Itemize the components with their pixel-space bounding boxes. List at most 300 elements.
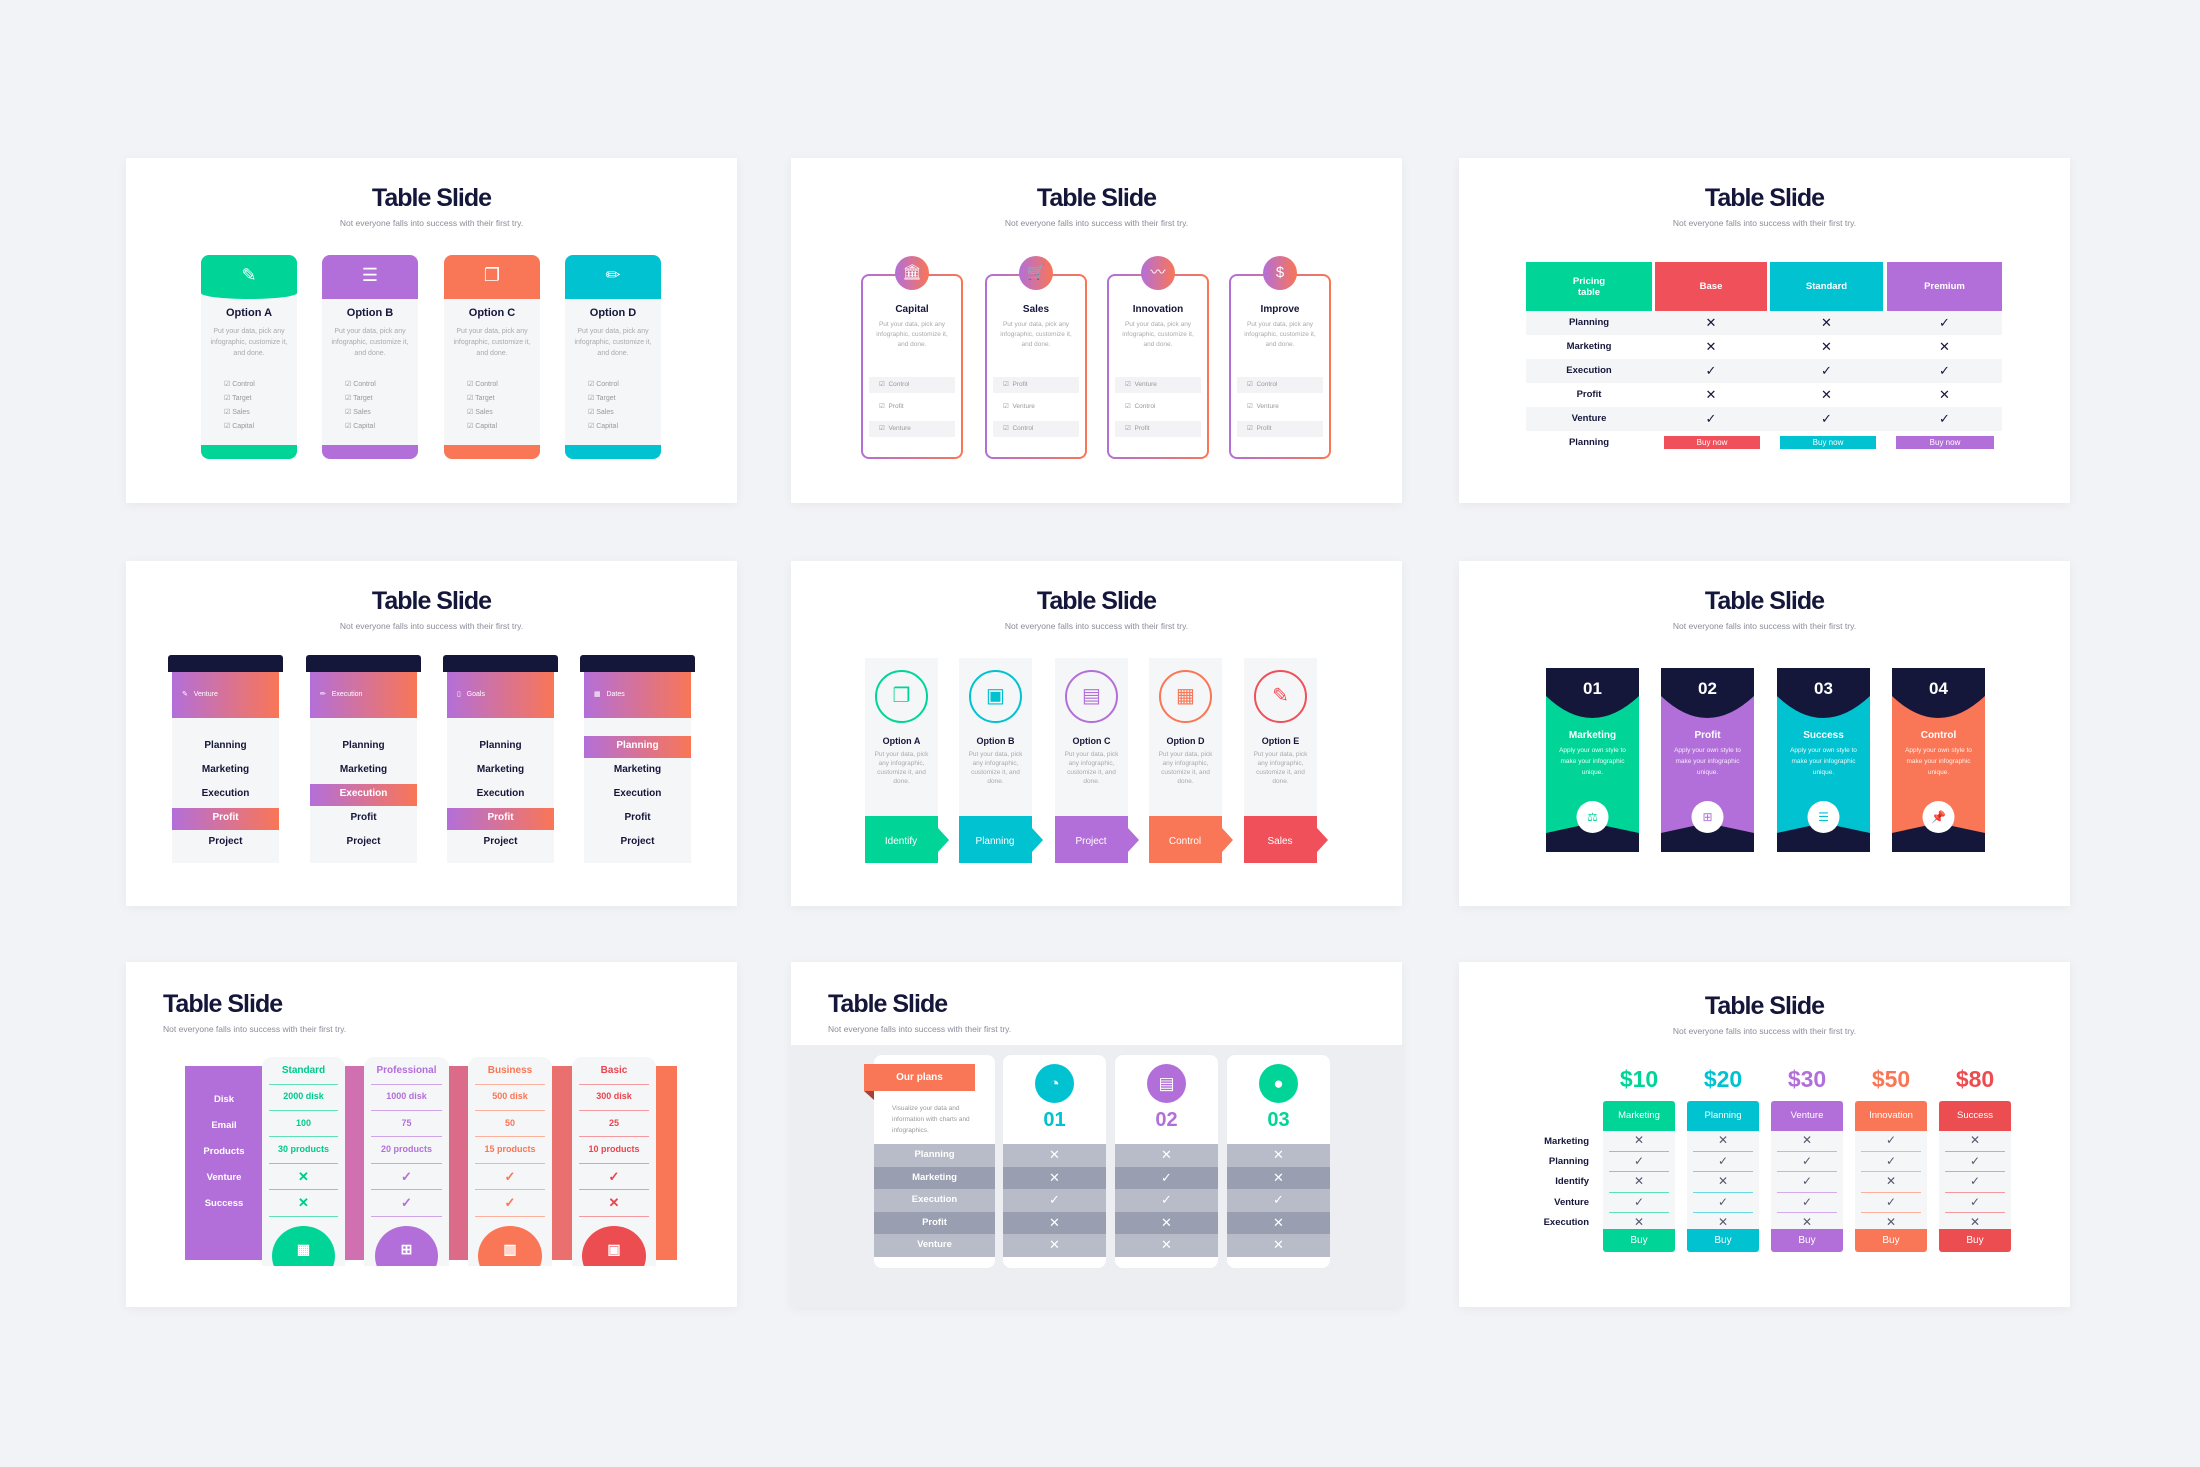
label column: Success [205, 1198, 243, 1209]
table: ✕ [1706, 387, 1716, 402]
plan: Business: 50 [505, 1118, 515, 1128]
card 02 Profit: ⊞ [1702, 810, 1713, 824]
plan: Business: 500 disk [492, 1091, 528, 1101]
plan: Professional [364, 1057, 449, 1266]
card: 03: ✕ [1273, 1237, 1284, 1252]
table [1526, 262, 2002, 449]
column $30 Venture: Venture [1791, 1110, 1823, 1121]
card: Our plans: Marketing [912, 1172, 957, 1183]
plan: Basic: ✓ [609, 1168, 619, 1184]
card: 01 [1003, 1055, 1106, 1268]
slide 1: option cards [126, 158, 737, 503]
column $80 Success [1939, 1066, 2011, 1252]
table: table [1578, 287, 1600, 298]
plan: Standard: 100 [296, 1118, 311, 1128]
card: Option D: ☑ Control [588, 381, 619, 388]
card: 03: ✕ [1273, 1147, 1284, 1162]
card: Option B: ☑ Target [345, 395, 373, 402]
card: 03: ● [1273, 1074, 1284, 1093]
card: Option A: ☑ Sales [224, 409, 250, 416]
column: Option E [1244, 658, 1328, 863]
plan: Professional: 20 products [381, 1144, 432, 1154]
column: Option C: Project [1075, 836, 1107, 847]
card: Option C [444, 255, 540, 459]
card 02 Profit: Apply your own style to make your infographic unique. [1674, 747, 1741, 776]
plan: Standard [262, 1057, 345, 1266]
table: Base [1700, 281, 1722, 292]
table: Pricing [1573, 276, 1605, 287]
header band [791, 962, 1402, 1045]
card: Option D [565, 255, 661, 459]
card: Option D: ☑ Target [588, 395, 616, 402]
card: Our plans: Our plans [896, 1072, 943, 1083]
card: Innovation: Put your data, pick any infographic, customize it, and done. [1122, 321, 1194, 348]
table: Premium [1924, 281, 1965, 292]
plan: Standard: ✕ [298, 1195, 309, 1210]
card: Improve: ☑ Profit [1247, 425, 1272, 432]
table: ✕ [1939, 339, 1950, 354]
card: 02: 02 [1155, 1109, 1178, 1131]
column: Option C [1055, 658, 1139, 863]
column: Dates: Execution [614, 788, 661, 799]
card 04 Control [1892, 668, 1985, 852]
card: Option C: Put your data, pick any infographic, customize it, and done. [453, 328, 531, 357]
slide 2: outlined cards: 🏛 [902, 264, 922, 281]
column: Goals: Profit [487, 812, 514, 823]
card: Sales [985, 256, 1087, 459]
card: Improve: ☑ Control [1247, 381, 1277, 388]
title: Table Slide [828, 990, 947, 1018]
subtitle: Not everyone falls into success with their first try. [1005, 621, 1188, 631]
column: Dates: Marketing [614, 764, 661, 775]
card 03 Success: Apply your own style to make your infographic unique. [1790, 747, 1857, 776]
slide 6: numbered cards [1459, 561, 2070, 906]
card: Option A [201, 255, 297, 459]
card 02 Profit [1661, 668, 1754, 852]
column $30 Venture: ✕ [1802, 1215, 1812, 1229]
column $50 Innovation: Buy [1882, 1235, 1900, 1246]
card: Option C: ☑ Sales [467, 409, 493, 416]
column $20 Planning: ✓ [1718, 1195, 1728, 1209]
card: Sales: ☑ Control [1003, 425, 1033, 432]
column: Option B: Planning [976, 836, 1014, 847]
column $20 Planning: ✓ [1718, 1154, 1728, 1168]
table: ✕ [1821, 339, 1832, 354]
column: Venture [168, 655, 283, 863]
column $80 Success: Success [1957, 1110, 1993, 1121]
label column: Disk [214, 1094, 234, 1105]
plan: Standard: ✕ [298, 1168, 309, 1184]
column: Venture: Profit [212, 812, 239, 823]
column $80 Success: $80 [1956, 1066, 1994, 1092]
card: 03 [1227, 1055, 1330, 1268]
plan: Business [468, 1057, 552, 1266]
row labels: Marketing [1544, 1136, 1589, 1147]
card: Our plans: Planning [914, 1149, 955, 1160]
column $10 Marketing: ✓ [1634, 1154, 1644, 1168]
card: Capital: Put your data, pick any infographic, customize it, and done. [876, 321, 948, 348]
title: Table Slide [1705, 992, 1824, 1020]
card 04 Control: 04 [1929, 679, 1948, 698]
table: Planning [1569, 437, 1609, 448]
column: Goals: Project [484, 836, 517, 847]
card: Option D: ✏ [605, 265, 621, 285]
table: ✓ [1821, 363, 1832, 378]
column: Execution: Marketing [340, 764, 387, 775]
column: Option B: Put your data, pick any infographic, customize it, and done. [969, 751, 1022, 785]
plan: Basic: 300 disk [596, 1091, 632, 1101]
card: Our plans: Visualize your data and information with charts and infographics. [892, 1105, 970, 1134]
column $30 Venture [1771, 1066, 1843, 1252]
column: Option A: Identify [885, 836, 917, 847]
table: ✓ [1939, 363, 1950, 378]
card: Improve: Improve [1261, 304, 1299, 315]
plan: Basic: 25 [609, 1118, 619, 1128]
title: Table Slide [1705, 184, 1824, 212]
column: Option E: Sales [1267, 836, 1293, 847]
column: Dates: ▦ Dates [594, 691, 625, 698]
card: 02: ✕ [1161, 1147, 1172, 1162]
column: Venture: ✎ Venture [182, 691, 218, 698]
column: Option A [865, 658, 949, 863]
column: Goals: Planning [479, 740, 522, 751]
plan: Professional: 75 [401, 1118, 412, 1128]
card: Innovation [1107, 256, 1209, 459]
column $10 Marketing: $10 [1620, 1066, 1658, 1092]
card 02 Profit: Profit [1694, 730, 1721, 741]
column $10 Marketing: ✕ [1634, 1215, 1644, 1229]
plan: Standard: Standard [282, 1065, 325, 1076]
column $10 Marketing: ✓ [1634, 1195, 1644, 1209]
column: Goals: ▯ Goals [457, 691, 485, 698]
column: Execution: Planning [342, 740, 385, 751]
column $30 Venture: $30 [1788, 1066, 1826, 1092]
column: Execution: Project [347, 836, 380, 847]
table: ✓ [1706, 411, 1716, 426]
card: Option B: ☑ Capital [345, 423, 375, 430]
table: Profit [1577, 389, 1601, 400]
column: Option D [1149, 658, 1233, 863]
column: Option B [959, 658, 1043, 863]
column: Option A: ❐ [893, 685, 910, 707]
card: Our plans: Execution [912, 1194, 957, 1205]
column: Option C: Option C [1072, 736, 1110, 746]
slide 3: pricing table [1459, 158, 2070, 503]
column: Dates: Profit [624, 812, 651, 823]
card: Innovation: Innovation [1133, 304, 1183, 315]
card: Option C: ☑ Target [467, 395, 495, 402]
card: Improve: ☑ Venture [1247, 403, 1279, 410]
subtitle: Not everyone falls into success with their first try. [163, 1024, 346, 1034]
card: Capital: ☑ Profit [879, 403, 904, 410]
row labels: Execution [1544, 1217, 1589, 1228]
card: 01: 01 [1043, 1109, 1066, 1131]
plan: Professional: ✓ [401, 1168, 412, 1184]
column: Option C: Put your data, pick any infographic, customize it, and done. [1065, 751, 1118, 785]
slide 2: outlined cards: 〰 [1150, 264, 1166, 281]
card: Innovation: ☑ Profit [1125, 425, 1150, 432]
column: Option A: Put your data, pick any infographic, customize it, and done. [875, 751, 928, 785]
table: Buy now [1813, 438, 1843, 447]
plan: Professional: ✓ [401, 1195, 412, 1210]
column $50 Innovation: Innovation [1869, 1110, 1913, 1121]
slide 2: outlined cards [791, 158, 1402, 503]
subtitle: Not everyone falls into success with their first try. [1005, 218, 1188, 228]
plan: Basic: ▣ [607, 1241, 621, 1257]
card: 02: ✓ [1161, 1192, 1172, 1207]
table: ✕ [1821, 387, 1832, 402]
card 04 Control: Apply your own style to make your infographic unique. [1905, 747, 1972, 776]
column: Option B: Option B [976, 736, 1014, 746]
column $10 Marketing [1603, 1066, 1675, 1252]
table: Buy now [1697, 438, 1727, 447]
card: Capital: Capital [895, 304, 929, 315]
plan: Basic: Basic [601, 1065, 627, 1076]
card 04 Control: Control [1921, 730, 1956, 741]
column $80 Success: Buy [1966, 1235, 1984, 1246]
plan: Standard: ▦ [297, 1241, 310, 1257]
column: Execution: Profit [350, 812, 377, 823]
row labels: Venture [1554, 1197, 1589, 1208]
table: ✓ [1706, 363, 1716, 378]
column $80 Success: ✕ [1970, 1133, 1980, 1147]
plan: Basic [572, 1057, 656, 1266]
card: Innovation: ☑ Control [1125, 403, 1155, 410]
card: 02 [1115, 1055, 1218, 1268]
card: Option A: ☑ Target [224, 395, 252, 402]
card: Option B [322, 255, 418, 459]
column $50 Innovation: ✓ [1886, 1133, 1896, 1147]
card: Sales: Sales [1023, 304, 1049, 315]
column: Option C: ▤ [1082, 685, 1101, 707]
card 01 Marketing [1546, 668, 1639, 852]
column $20 Planning: ✕ [1718, 1174, 1728, 1188]
plan: Basic: 10 products [588, 1144, 640, 1154]
column $30 Venture: ✓ [1802, 1195, 1812, 1209]
table: Venture [1572, 413, 1606, 424]
label column: Products [203, 1146, 245, 1157]
subtitle: Not everyone falls into success with their first try. [340, 218, 523, 228]
plan: Basic: ✕ [609, 1195, 619, 1210]
table: Buy now [1930, 438, 1960, 447]
column $50 Innovation: ✓ [1886, 1195, 1896, 1209]
title: Table Slide [163, 990, 282, 1018]
column $20 Planning: ✕ [1718, 1133, 1728, 1147]
card: 03: 03 [1267, 1109, 1290, 1131]
slide 2: outlined cards: 🛒 [1027, 264, 1045, 281]
plan: Professional: ⊞ [401, 1241, 412, 1257]
card: 03: ✕ [1273, 1215, 1284, 1230]
column $50 Innovation: ✕ [1886, 1215, 1896, 1229]
card: 01: ✕ [1049, 1237, 1060, 1252]
card 03 Success: Success [1803, 730, 1844, 741]
plan: Business: 15 products [484, 1144, 536, 1154]
table: Execution [1566, 365, 1612, 376]
column $10 Marketing: Marketing [1618, 1110, 1660, 1121]
card: Our plans: Profit [922, 1217, 947, 1228]
column: Execution: Execution [340, 788, 387, 799]
card: Option C: ☑ Capital [467, 423, 497, 430]
card: Option B: ☑ Control [345, 381, 376, 388]
card 04 Control: 📌 [1931, 809, 1946, 824]
column: Option E: Option E [1262, 736, 1299, 746]
column: Option D: Option D [1166, 736, 1204, 746]
column: Venture: Project [209, 836, 242, 847]
column $50 Innovation [1855, 1066, 1927, 1252]
plan: Business: ✓ [505, 1195, 515, 1210]
column $10 Marketing: ✕ [1634, 1174, 1644, 1188]
column: Option D: Control [1169, 836, 1201, 847]
column: Option B: ▣ [986, 685, 1005, 707]
slide 7: plans comparison [126, 962, 737, 1307]
subtitle: Not everyone falls into success with their first try. [340, 621, 523, 631]
label column: Venture [207, 1172, 241, 1183]
table: ✕ [1706, 315, 1716, 330]
card: 01: ✕ [1049, 1170, 1060, 1185]
slide 5: options with arrow tabs [791, 561, 1402, 906]
column: Dates: Project [621, 836, 654, 847]
title: Table Slide [372, 184, 491, 212]
table: Planning [1569, 317, 1609, 328]
card: Option D: ☑ Sales [588, 409, 614, 416]
title: Table Slide [372, 587, 491, 615]
column $50 Innovation: ✓ [1886, 1154, 1896, 1168]
card: Option B: ☰ [362, 265, 378, 285]
subtitle: Not everyone falls into success with their first try. [1673, 621, 1856, 631]
card: Option A: ☑ Control [224, 381, 255, 388]
column $20 Planning: $20 [1704, 1066, 1742, 1092]
subtitle: Not everyone falls into success with their first try. [828, 1024, 1011, 1034]
column: Option D: Put your data, pick any infographic, customize it, and done. [1159, 751, 1212, 785]
column $30 Venture: Buy [1798, 1235, 1816, 1246]
card: Option A: Option A [226, 307, 272, 319]
column: Option E: Put your data, pick any infographic, customize it, and done. [1254, 751, 1307, 785]
card 02 Profit: 02 [1698, 679, 1717, 698]
card: Our plans: Venture [917, 1239, 952, 1250]
column: Dates [580, 655, 695, 863]
card: Our plans [874, 1055, 995, 1268]
label column [185, 1066, 263, 1260]
card: Innovation: ☑ Venture [1125, 381, 1157, 388]
card: Option C: ❐ [484, 265, 500, 285]
card: 02: ▤ [1158, 1074, 1175, 1093]
card: Sales: ☑ Venture [1003, 403, 1035, 410]
row labels [1544, 1136, 1589, 1228]
card: Option D: ☑ Capital [588, 423, 618, 430]
column: Execution [306, 655, 421, 863]
card 03 Success [1777, 668, 1870, 852]
label column: Email [211, 1120, 237, 1131]
card: Option D: Option D [590, 307, 636, 319]
slide 4: highlighted rows [126, 561, 737, 906]
card: 03: ✕ [1273, 1170, 1284, 1185]
card 01 Marketing: 01 [1583, 679, 1602, 698]
card 03 Success: ☰ [1818, 810, 1829, 824]
plan: Professional: 1000 disk [386, 1091, 427, 1101]
card: 03: ✓ [1273, 1192, 1284, 1207]
column: Option E: ✎ [1272, 685, 1289, 707]
card: 01: ✕ [1049, 1147, 1060, 1162]
card 01 Marketing: ⚖ [1587, 810, 1598, 824]
column: Venture: Execution [202, 788, 249, 799]
column: Venture: Planning [204, 740, 247, 751]
card: Option B: Option B [347, 307, 393, 319]
table: Standard [1806, 281, 1847, 292]
plan: Professional: Professional [376, 1065, 437, 1076]
table: ✕ [1821, 315, 1832, 330]
card: 01: ◔ [1049, 1074, 1060, 1093]
column: Goals: Execution [477, 788, 524, 799]
column: Venture: Marketing [202, 764, 249, 775]
column: Dates: Planning [616, 740, 659, 751]
card 01 Marketing: Apply your own style to make your infographic unique. [1559, 747, 1626, 776]
card: Option C: Option C [469, 307, 515, 319]
card: Option B: Put your data, pick any infographic, customize it, and done. [331, 328, 409, 357]
card: Option A: ✎ [241, 265, 257, 285]
card: 02: ✓ [1161, 1170, 1172, 1185]
column: Goals [443, 655, 558, 863]
card: Improve: Put your data, pick any infographic, customize it, and done. [1244, 321, 1316, 348]
column $20 Planning: Buy [1714, 1235, 1732, 1246]
separator bars [345, 1066, 677, 1260]
row labels: Planning [1549, 1156, 1589, 1167]
column: Execution: ✏ Execution [320, 691, 362, 698]
title: Table Slide [1705, 587, 1824, 615]
column $30 Venture: ✓ [1802, 1154, 1812, 1168]
column $50 Innovation: ✕ [1886, 1174, 1896, 1188]
column $80 Success: ✕ [1970, 1215, 1980, 1229]
column $80 Success: ✓ [1970, 1195, 1980, 1209]
column $10 Marketing: ✕ [1634, 1133, 1644, 1147]
card: Capital [861, 256, 963, 459]
column $10 Marketing: Buy [1630, 1235, 1648, 1246]
column: Option D: ▦ [1176, 685, 1195, 707]
card: Option B: ☑ Sales [345, 409, 371, 416]
plan: Business: ✓ [505, 1168, 515, 1184]
table: Marketing [1567, 341, 1611, 352]
column: Option A: Option A [883, 736, 920, 746]
slide 8: our plans grey table [791, 962, 1402, 1307]
title: Table Slide [1037, 184, 1156, 212]
card: Capital: ☑ Control [879, 381, 909, 388]
title: Table Slide [1037, 587, 1156, 615]
card: Option A: ☑ Capital [224, 423, 254, 430]
row labels: Identify [1555, 1176, 1589, 1187]
plan: Business: ▥ [503, 1241, 517, 1257]
table: ✓ [1939, 411, 1950, 426]
card: Capital: ☑ Venture [879, 425, 911, 432]
card: 01: ✓ [1049, 1192, 1060, 1207]
table: ✓ [1939, 315, 1950, 330]
column $80 Success: ✓ [1970, 1154, 1980, 1168]
card: Improve [1229, 256, 1331, 459]
plan: Standard: 30 products [278, 1144, 329, 1154]
slide 9: price columns [1459, 962, 2070, 1307]
card: 02: ✕ [1161, 1215, 1172, 1230]
card 03 Success: 03 [1814, 679, 1833, 698]
table: ✕ [1939, 387, 1950, 402]
column $20 Planning: ✕ [1718, 1215, 1728, 1229]
card: Sales: ☑ Profit [1003, 381, 1028, 388]
card: 01: ✕ [1049, 1215, 1060, 1230]
column $50 Innovation: $50 [1872, 1066, 1910, 1092]
slide 2: outlined cards: $ [1276, 264, 1284, 281]
plan: Business: Business [488, 1065, 532, 1076]
card 01 Marketing: Marketing [1569, 730, 1616, 741]
column $20 Planning [1687, 1066, 1759, 1252]
column $20 Planning: Planning [1704, 1110, 1741, 1121]
card: Option C: ☑ Control [467, 381, 498, 388]
